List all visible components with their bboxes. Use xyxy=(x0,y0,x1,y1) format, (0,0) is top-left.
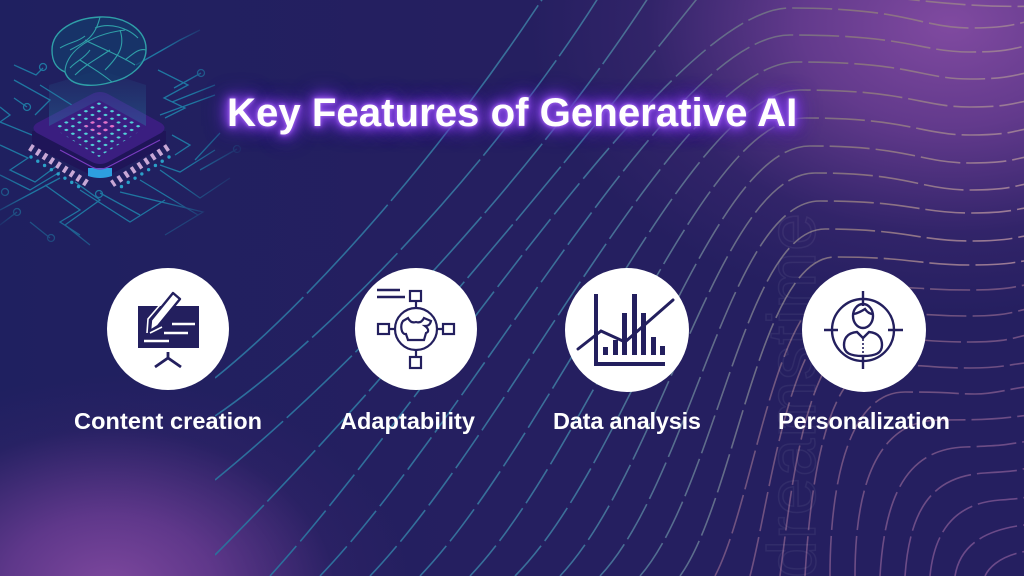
shoulders xyxy=(844,332,882,356)
chip top xyxy=(34,92,164,164)
board writing lines xyxy=(144,324,195,341)
chip pin pads xyxy=(31,157,169,190)
chip side xyxy=(32,131,166,178)
background wave lines xyxy=(215,0,1024,576)
tie xyxy=(862,339,864,356)
chip legs xyxy=(30,147,168,184)
pencil xyxy=(150,293,180,331)
glass prism xyxy=(49,70,146,126)
head xyxy=(853,304,873,328)
node squares xyxy=(410,291,421,301)
label: personalization: Personalization xyxy=(778,408,950,434)
title: Key Features of Generative AI xyxy=(227,90,797,135)
pink dots xyxy=(84,117,116,135)
hair xyxy=(854,309,873,314)
label: content creation: Content creation xyxy=(74,408,262,434)
pencil outline on board xyxy=(147,305,162,333)
circle icon: adaptability xyxy=(355,268,477,390)
dot matrix xyxy=(50,100,148,157)
chart axes xyxy=(596,294,665,364)
crosshair xyxy=(824,291,903,369)
board stand xyxy=(155,352,181,367)
brain xyxy=(52,17,146,85)
illustration: AI chip and brain xyxy=(0,17,240,245)
target ring xyxy=(832,299,894,361)
circuit traces xyxy=(0,30,240,245)
chip glow strip xyxy=(88,168,112,178)
watermark: dreamstime xyxy=(754,213,830,576)
feature labels xyxy=(74,408,950,434)
circle icon: data analysis xyxy=(565,268,689,392)
label: adaptability: Adaptability xyxy=(340,408,475,434)
ring xyxy=(395,308,437,350)
connectors xyxy=(389,301,443,357)
text lines xyxy=(377,290,405,297)
label: data analysis: Data analysis xyxy=(553,408,701,434)
circle icon: personalization xyxy=(802,268,926,392)
circle icon: content creation xyxy=(107,268,229,390)
trend line xyxy=(578,300,673,349)
presentation board xyxy=(138,306,199,348)
puzzle shape xyxy=(401,318,431,340)
chip edge xyxy=(60,140,160,169)
bars xyxy=(603,294,665,355)
